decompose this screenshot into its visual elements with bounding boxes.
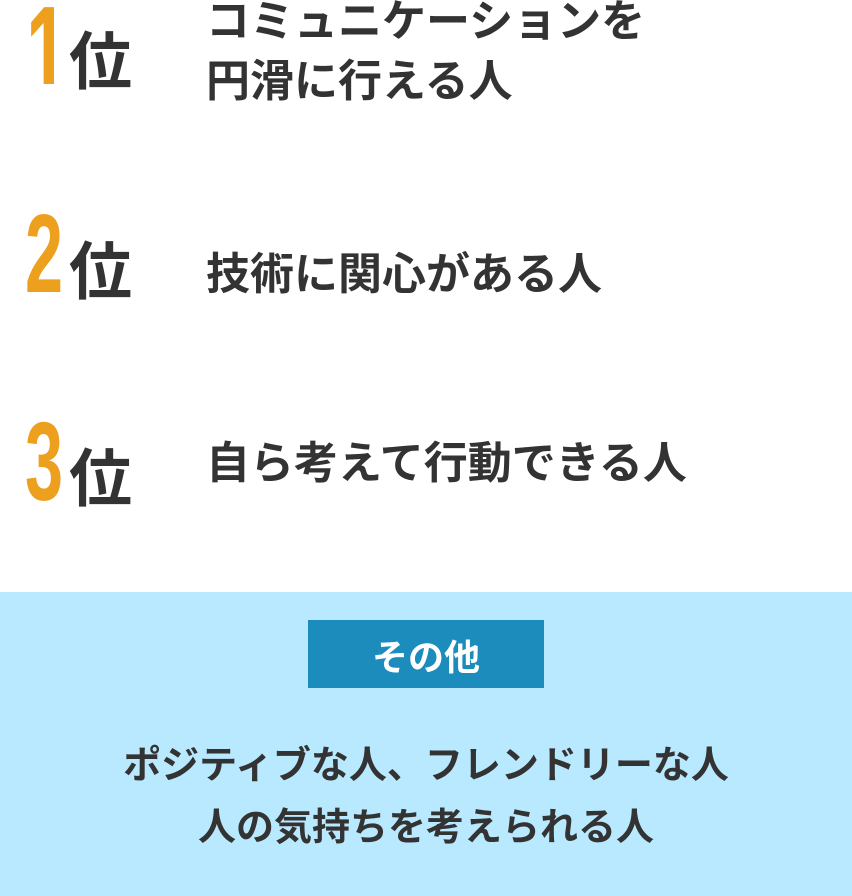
rank 1 description: [206, 0, 645, 106]
others badge: [308, 620, 544, 688]
rank 2 description: 技術に関心がある人: [206, 250, 602, 299]
others description: [123, 744, 729, 849]
rank suffix: 位: [69, 28, 132, 98]
rank 2: [25, 205, 602, 315]
rank 1 description: 円滑に行える人: [206, 57, 513, 106]
others badge: その他: [372, 637, 480, 678]
others description: ポジティブな人、フレンドリーな人: [123, 745, 729, 787]
rank 3 description: 自ら考えて行動できる人: [206, 439, 687, 488]
rank suffix: 位: [69, 238, 132, 308]
panel: others: [0, 592, 852, 896]
rank 1: [31, 0, 645, 106]
rank 3: [25, 410, 687, 520]
others description: 人の気持ちを考えられる人: [198, 807, 654, 849]
rank suffix: 位: [69, 445, 132, 515]
